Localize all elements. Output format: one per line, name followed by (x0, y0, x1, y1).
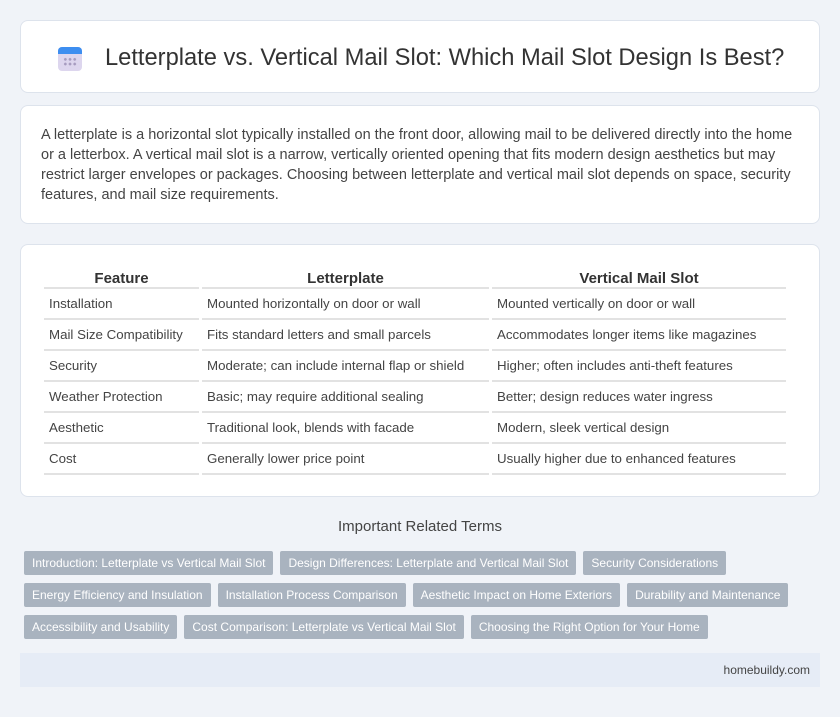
intro text: A letterplate is a horizontal slot typically installed on the front door, allowing mail to be delivered directly into the home or a letterbox. A vertical mail slot is a narrow, vertically oriented opening that fits modern design aesthetics but may restrict larger envelopes or packages. Choosing between letterplate and vertical mail slot depends on space, security features, and mail size requirements. (41, 127, 792, 203)
comparison table panel: Basic; may require additional sealing (207, 389, 424, 404)
comparison table panel: Fits standard letters and small parcels (207, 327, 431, 342)
comparison table panel: Feature (94, 270, 149, 286)
comparison table panel: Usually higher due to enhanced features (497, 451, 736, 466)
tags: Security Considerations (591, 556, 718, 570)
comparison table panel: Moderate; can include internal flap or shield (207, 358, 464, 373)
comparison table panel: Weather Protection (49, 389, 163, 404)
footer (20, 653, 820, 687)
tags (24, 551, 788, 639)
tags: Aesthetic Impact on Home Exteriors (421, 588, 612, 602)
tags: Durability and Maintenance (635, 588, 780, 602)
comparison table panel: Higher; often includes anti-theft features (497, 358, 733, 373)
tags: Cost Comparison: Letterplate vs Vertical Mail Slot (192, 620, 456, 634)
comparison table panel: Installation (49, 296, 113, 311)
header card (20, 20, 820, 93)
comparison table panel: Mounted horizontally on door or wall (207, 296, 421, 311)
related terms heading: Important Related Terms (338, 518, 502, 535)
comparison table panel: Modern, sleek vertical design (497, 420, 669, 435)
comparison table panel: Mounted vertically on door or wall (497, 296, 695, 311)
icon: calendar (58, 47, 82, 71)
tags: Design Differences: Letterplate and Vertical Mail Slot (288, 556, 568, 570)
title: Letterplate vs. Vertical Mail Slot: Which Mail Slot Design Is Best? (105, 45, 784, 71)
tags: Accessibility and Usability (32, 620, 169, 634)
comparison table panel (20, 244, 820, 497)
footer: homebuildy.com (724, 663, 810, 677)
tags: Installation Process Comparison (226, 588, 398, 602)
comparison table panel: Traditional look, blends with facade (207, 420, 414, 435)
comparison table panel: Aesthetic (49, 420, 104, 435)
tags: Choosing the Right Option for Your Home (479, 620, 700, 634)
comparison table panel: Letterplate (307, 270, 384, 286)
comparison table panel: Vertical Mail Slot (579, 270, 699, 286)
tags: Introduction: Letterplate vs Vertical Mail Slot (32, 556, 265, 570)
comparison table panel: Generally lower price point (207, 451, 364, 466)
tags: Energy Efficiency and Insulation (32, 588, 203, 602)
intro text (20, 105, 820, 224)
comparison table panel: Mail Size Compatibility (49, 327, 183, 342)
comparison table panel: Better; design reduces water ingress (497, 389, 713, 404)
comparison table panel: Accommodates longer items like magazines (497, 327, 756, 342)
comparison table panel: Cost (49, 451, 76, 466)
comparison table panel: Security (49, 358, 97, 373)
